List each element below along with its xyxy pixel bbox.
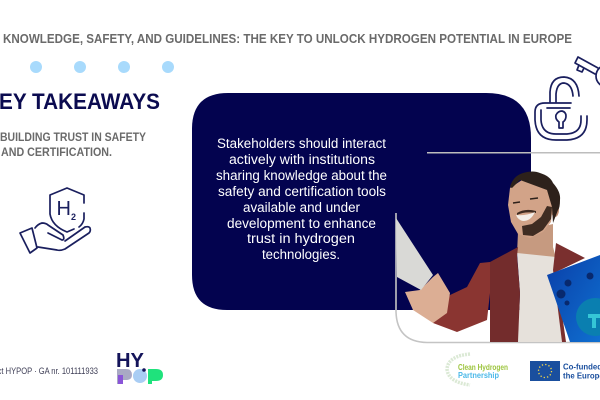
message text: actively with institutions	[229, 152, 375, 167]
man's neck	[517, 224, 556, 258]
frame line	[396, 213, 600, 342]
logo: HyPOP: HY	[116, 350, 145, 372]
hand	[405, 273, 450, 323]
subheading	[0, 132, 146, 159]
ear	[551, 203, 559, 217]
message text: Stakeholders should interact	[217, 136, 386, 151]
logo: Clean Hydrogen Partnership: Partnership	[458, 371, 499, 380]
icon: hand holding H2 shield: H	[56, 198, 71, 220]
logo: HyPOP	[116, 350, 163, 384]
decorative dots row	[30, 61, 174, 73]
white cutout frame	[396, 310, 490, 342]
panel: navy message card	[192, 93, 531, 310]
icon: open padlock and key	[535, 57, 600, 140]
logo: Clean Hydrogen Partnership	[447, 354, 508, 385]
beard	[522, 206, 552, 236]
hair	[510, 172, 560, 223]
logo: Clean Hydrogen Partnership: Clean Hydrogen	[458, 363, 508, 372]
shirt sleeve	[433, 262, 490, 332]
icon: hand holding H2 shield	[20, 188, 90, 253]
photo: smiling man shaking hands	[396, 172, 600, 342]
paper or other hand	[396, 218, 433, 290]
tablet molecules	[556, 272, 594, 306]
divider line	[427, 152, 600, 154]
moustache	[517, 210, 536, 215]
logo: EU flag and co-funded text	[530, 361, 600, 381]
tablet letter mark	[588, 314, 600, 328]
face	[508, 180, 553, 238]
maroon shirt body	[490, 247, 520, 342]
subheading: BUILDING TRUST IN SAFETY	[0, 132, 146, 144]
tablet	[547, 255, 600, 342]
message text: available and under	[243, 200, 360, 215]
subheading: AND CERTIFICATION.	[1, 147, 112, 159]
message text: development to enhance	[227, 216, 376, 231]
eyes	[513, 198, 538, 203]
white t-shirt	[517, 253, 562, 342]
message text	[216, 136, 387, 262]
message text: technologies.	[262, 247, 340, 262]
icon: hand holding H2 shield: 2	[71, 212, 76, 222]
message text: safety and certification tools	[218, 184, 386, 199]
message text: sharing knowledge about the	[216, 168, 387, 183]
message text: trust in hydrogen	[247, 231, 355, 246]
tablet hydrogen symbol	[576, 298, 600, 336]
smile	[516, 212, 535, 221]
